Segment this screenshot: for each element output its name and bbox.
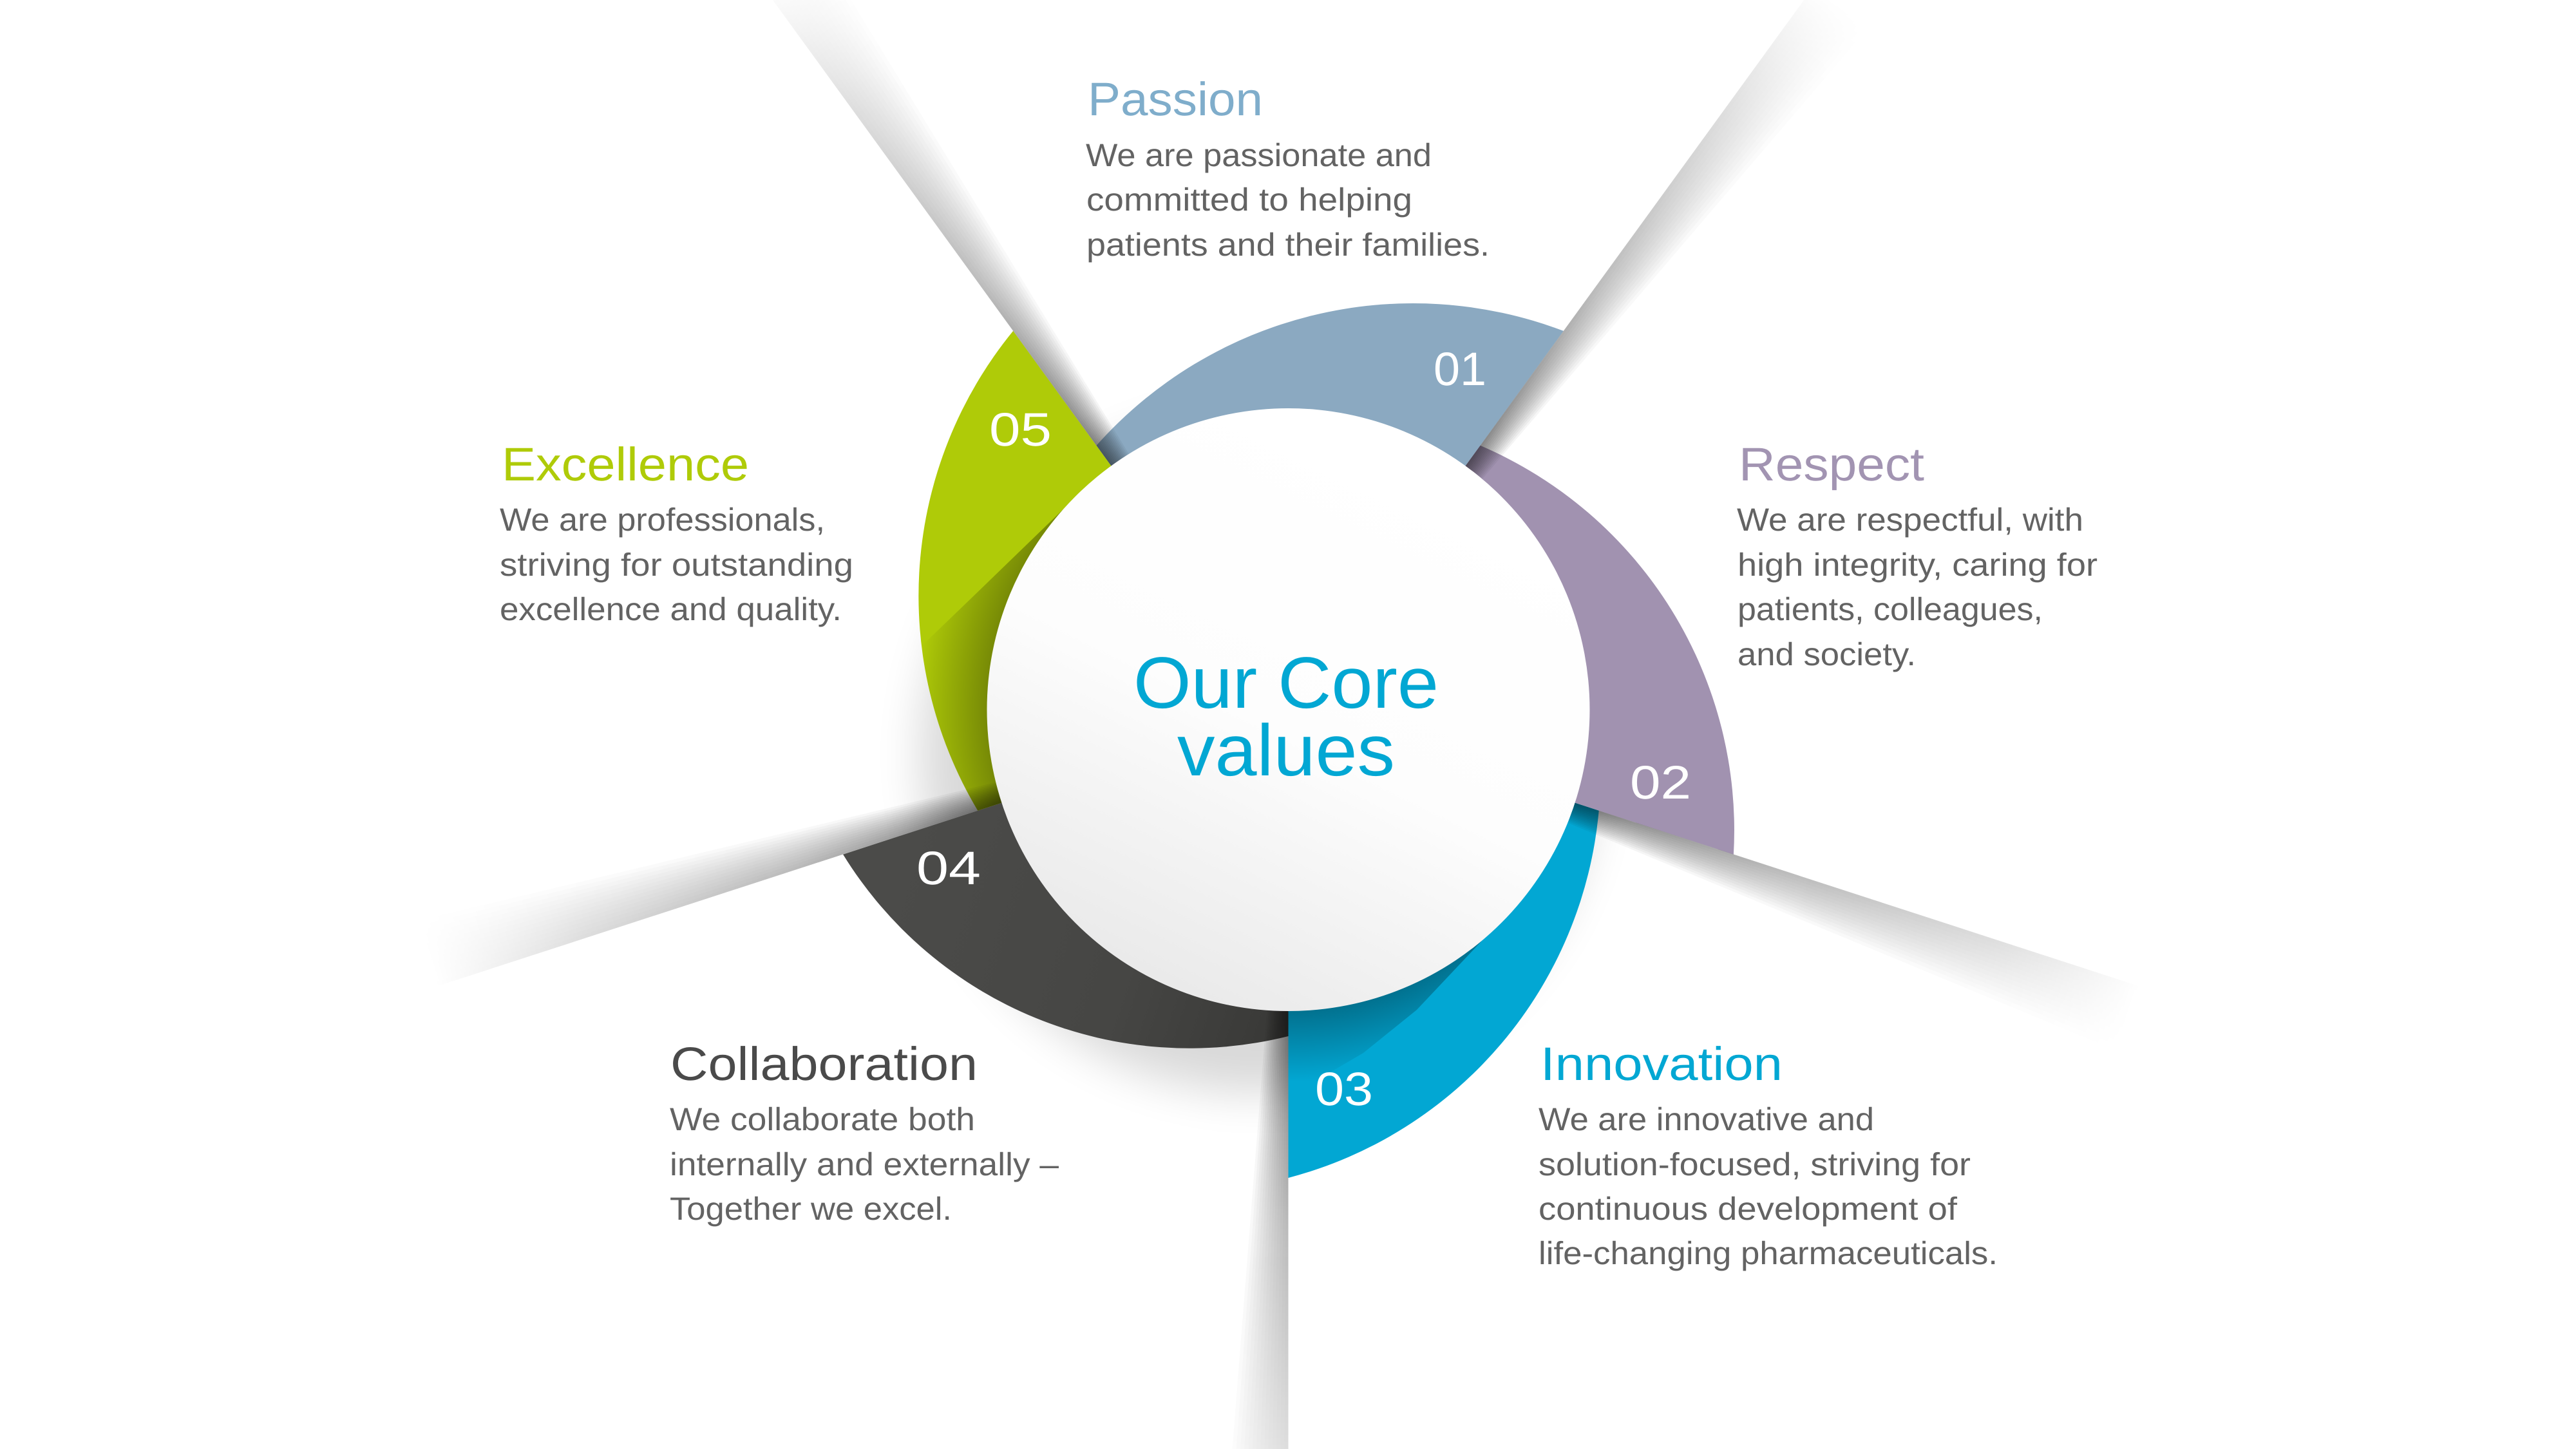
body: Respect: and society. <box>1738 636 1916 672</box>
heading: Innovation: Innovation <box>1540 1038 1783 1090</box>
body: Innovation <box>1539 1101 1998 1271</box>
body: Respect: high integrity, caring for <box>1738 547 2098 583</box>
body: Collaboration: We collaborate both <box>670 1101 975 1137</box>
blade 05: Excellence <box>918 331 1112 811</box>
shadow ray: bottom <box>1240 1011 1288 1449</box>
number 05: 05 <box>989 404 1052 456</box>
body: Excellence: excellence and quality. <box>500 591 842 627</box>
body: Respect <box>1737 502 2098 672</box>
heading: Excellence: Excellence <box>502 439 749 491</box>
heading: Collaboration: Collaboration <box>670 1038 978 1090</box>
shadow ray: right <box>1567 802 2103 1001</box>
number 04: 04 <box>916 842 981 895</box>
body: Respect: We are respectful, with <box>1737 502 2083 538</box>
number 03: 03 <box>1315 1063 1373 1115</box>
shadow ray: upper right <box>1466 17 1804 479</box>
blade 01: Passion <box>1096 303 1564 710</box>
shadow ray: left <box>473 784 1002 974</box>
number 01: 01 <box>1434 343 1486 395</box>
heading: Passion: Passion <box>1088 73 1263 126</box>
body: Excellence <box>500 502 853 627</box>
body: Passion <box>1086 137 1490 263</box>
body: Excellence: striving for outstanding <box>500 547 853 583</box>
body: Innovation: continuous development of <box>1539 1191 1957 1227</box>
text block: Innovation <box>1539 1038 1998 1271</box>
centre title <box>1133 642 1439 791</box>
disc soft drop shadow <box>921 417 1597 1093</box>
body: Passion: We are passionate and <box>1086 137 1432 173</box>
body: Passion: committed to helping <box>1086 182 1412 218</box>
text block: Excellence <box>500 439 853 627</box>
blade 02: Respect <box>1288 446 1734 855</box>
body: Innovation: solution-focused, striving for <box>1539 1146 1971 1182</box>
central disc <box>987 408 1589 1011</box>
text block: Passion <box>1086 73 1490 263</box>
body: Innovation: life-changing pharmaceuticals. <box>1539 1235 1998 1271</box>
body: Collaboration: Together we excel. <box>670 1191 952 1227</box>
body: Innovation: We are innovative and <box>1539 1101 1874 1137</box>
text block: Collaboration <box>670 1038 1059 1227</box>
centre title: Our Core <box>1133 642 1439 723</box>
text block: Respect <box>1737 439 2098 672</box>
body: Excellence: We are professionals, <box>500 502 825 538</box>
blade 04: Collaboration <box>843 710 1288 1048</box>
heading: Respect: Respect <box>1739 439 1924 491</box>
body: Collaboration: internally and externally – <box>670 1146 1059 1182</box>
centre title: values <box>1177 710 1395 791</box>
shadow ray: upper left <box>786 13 1128 466</box>
blade 03: Innovation <box>1288 802 1599 1178</box>
body: Respect: patients, colleagues, <box>1738 591 2043 627</box>
number 02: 02 <box>1630 757 1691 809</box>
body: Passion: patients and their families. <box>1086 227 1490 263</box>
body: Collaboration <box>670 1101 1059 1227</box>
